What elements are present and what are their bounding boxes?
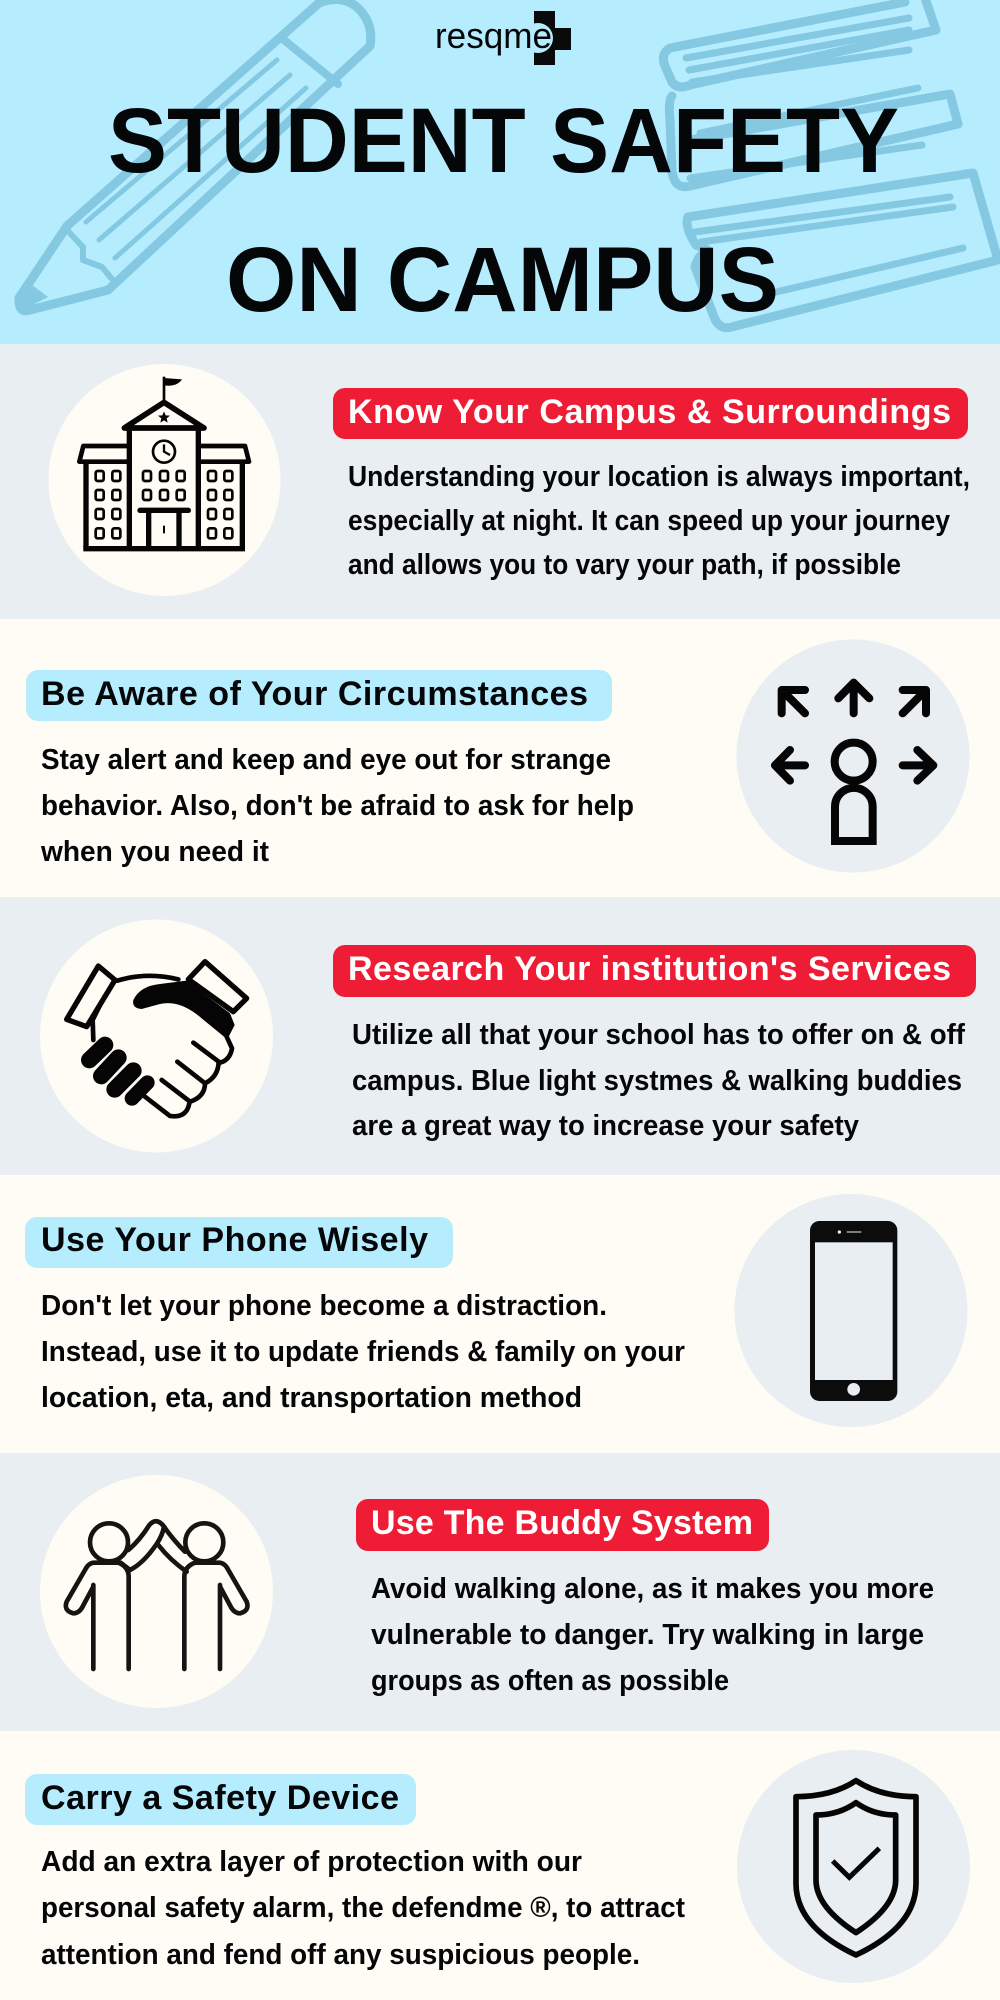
text block: and allows you to vary your path, if possible [348, 549, 901, 581]
heading pill [356, 1499, 769, 1551]
heading pill: Use The Buddy System [371, 1504, 753, 1542]
text block: are a great way to increase your safety [352, 1110, 859, 1142]
panel: safety device [0, 1731, 1000, 2000]
heading pill: Carry a Safety Device [41, 1779, 399, 1817]
panel: know your campus [0, 344, 1000, 619]
text block: Add an extra layer of protection with our [41, 1846, 582, 1878]
text block: Avoid walking alone, as it makes you more [371, 1573, 934, 1605]
heading pill [25, 1217, 453, 1268]
heading pill [333, 945, 976, 997]
panel: research services [0, 897, 1000, 1175]
heading pill: Know Your Campus & Surroundings [348, 393, 951, 431]
text block [352, 1019, 965, 1142]
panel: buddy system [0, 1453, 1000, 1731]
text block: when you need it [40, 836, 269, 868]
text block: location, eta, and transportation method [41, 1382, 582, 1414]
text block [41, 1846, 685, 1971]
text block: vulnerable to danger. Try walking in large [371, 1619, 924, 1651]
text block: Stay alert and keep and eye out for strange [41, 744, 611, 776]
title: STUDENT SAFETY [108, 90, 899, 192]
panel: be aware [0, 619, 1000, 897]
icon: handshake [40, 920, 273, 1152]
icon: smartphone [734, 1194, 968, 1427]
icon: person with arrows [736, 640, 970, 872]
text block: groups as often as possible [371, 1665, 729, 1697]
icon: shield with check [737, 1750, 970, 1983]
text block: especially at night. It can speed up your journey [348, 505, 950, 537]
text block: attention and fend off any suspicious people. [41, 1939, 640, 1971]
title [108, 90, 899, 331]
logo [435, 11, 571, 65]
logo: resqme [435, 15, 552, 56]
panel: header [0, 0, 1000, 344]
heading pill: Research Your institution's Services [348, 950, 951, 988]
text block [348, 461, 970, 581]
text block: campus. Blue light systmes & walking buddies [352, 1065, 962, 1097]
text block: Instead, use it to update friends & family on your [41, 1336, 685, 1368]
icon: school building [48, 364, 280, 596]
text block: personal safety alarm, the defendme ®, to attract [41, 1892, 685, 1924]
heading pill [26, 670, 612, 721]
heading pill: Be Aware of Your Circumstances [41, 675, 588, 713]
text block [371, 1573, 934, 1697]
icon: books background [663, 0, 998, 328]
heading pill: Use Your Phone Wisely [41, 1221, 428, 1259]
panel: use your phone [0, 1175, 1000, 1453]
heading pill [25, 1774, 416, 1825]
text block: Don't let your phone become a distraction. [41, 1290, 607, 1322]
icon: pencil background [16, 0, 371, 312]
text block: Utilize all that your school has to offer on & off [352, 1019, 965, 1051]
icon: two people high five [40, 1475, 273, 1708]
text block: behavior. Also, don't be afraid to ask for help [41, 790, 634, 822]
text block [40, 744, 634, 868]
title: ON CAMPUS [226, 229, 779, 331]
text block [41, 1290, 685, 1414]
